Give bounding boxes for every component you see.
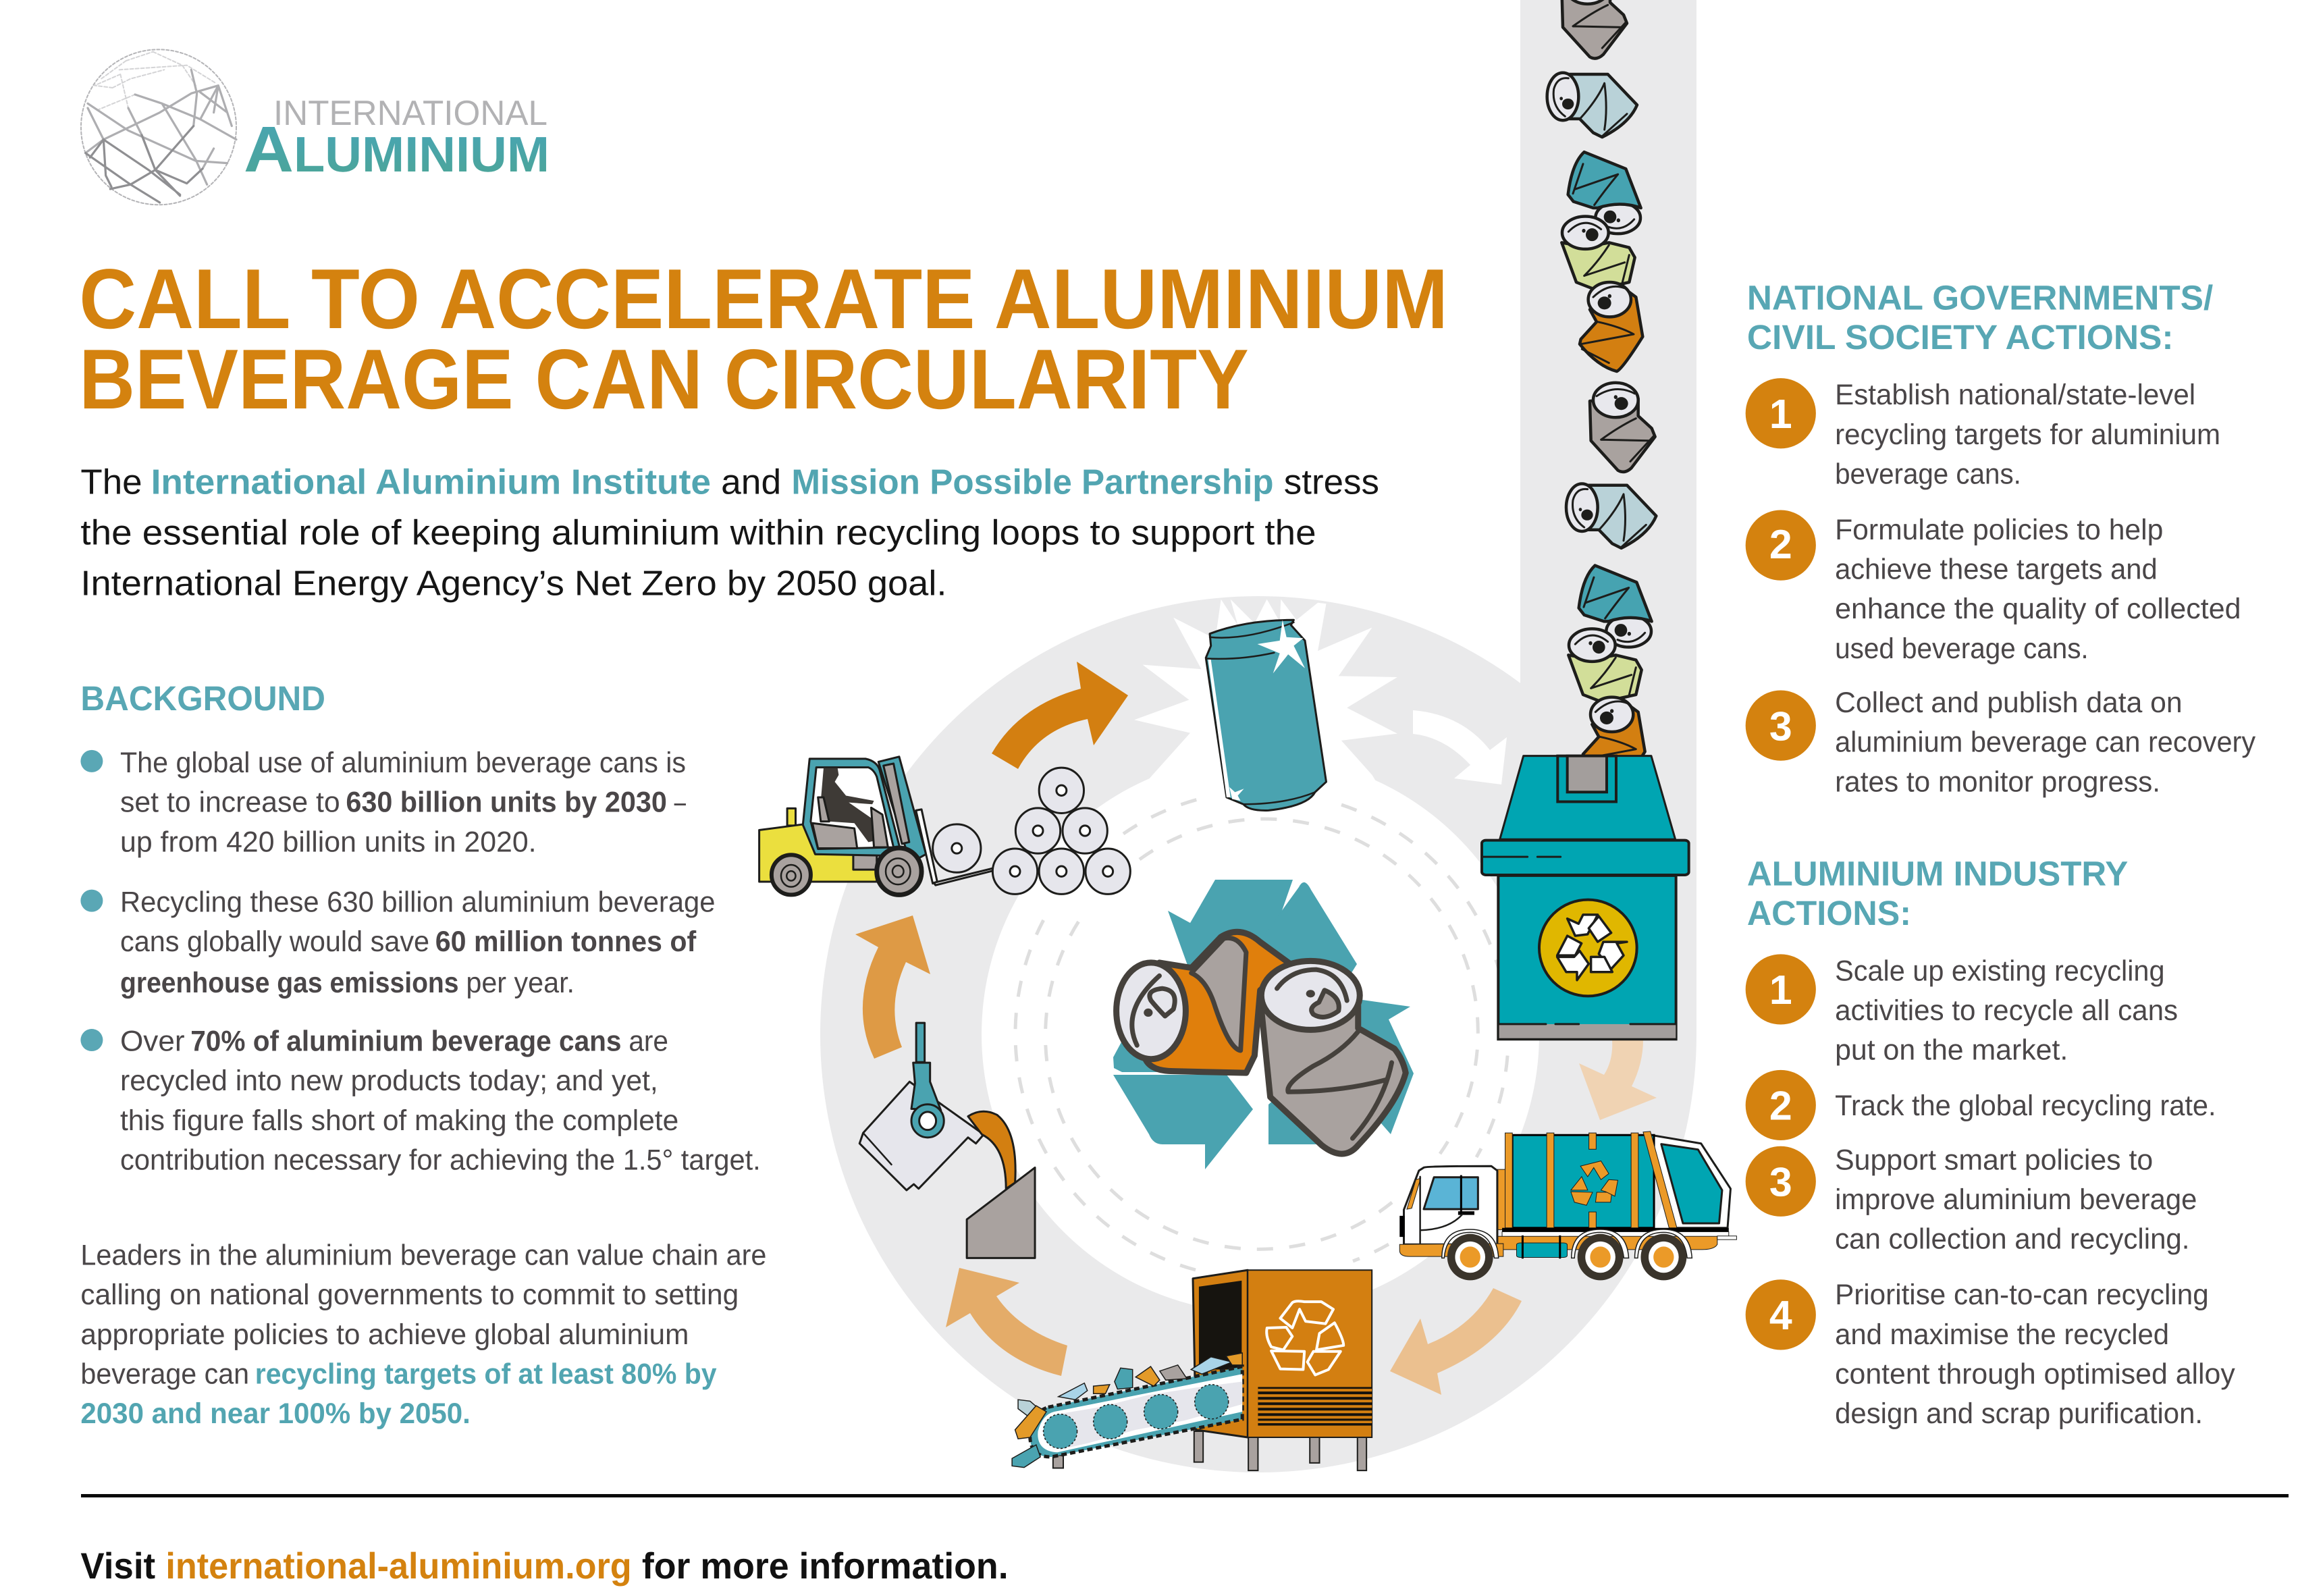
action 3: 3	[1769, 703, 1792, 749]
logo wordmark: A	[244, 113, 294, 186]
icon: central recycling symbol	[1113, 880, 1414, 1169]
background bullet 3: Over	[120, 1026, 185, 1058]
action 3: Collect and publish data on	[1835, 687, 2183, 720]
action 1: Scale up existing recycling	[1835, 955, 2165, 988]
logo wordmark	[244, 94, 550, 186]
call to governments paragraph: appropriate policies to achieve global aluminium	[80, 1319, 689, 1352]
footer text	[80, 1546, 1009, 1587]
yellow recycling badge	[1539, 900, 1637, 996]
action 3: can collection and recycling.	[1835, 1224, 2189, 1256]
icon: forklift carrying aluminium rolls	[759, 757, 1130, 895]
title: CALL TO ACCELERATE ALUMINIUM	[79, 252, 1448, 347]
action 4: 4	[1769, 1293, 1793, 1338]
background bullet 3: this figure falls short of making the complete	[120, 1105, 678, 1138]
icon: new teal can with sparkle	[1206, 620, 1326, 810]
arrow: rolls to new can	[992, 662, 1128, 769]
footer text: international-aluminium.org	[165, 1546, 632, 1587]
introduction paragraph	[80, 463, 1379, 604]
introduction paragraph: Mission Possible Partnership	[791, 463, 1274, 503]
action 4: design and scrap purification.	[1835, 1398, 2203, 1431]
conveyor belt	[1030, 1366, 1242, 1457]
arrow: melting to rolling	[855, 915, 930, 1059]
heading: ALUMINIUM INDUSTRY	[1747, 856, 2129, 894]
recycling symbol on machine	[1266, 1301, 1343, 1375]
action 4: Prioritise can-to-can recycling	[1835, 1279, 2209, 1312]
action 1: put on the market.	[1835, 1035, 2068, 1067]
machine legs	[1053, 1431, 1366, 1470]
background bullet 3: recycled into new products today; and yet,	[120, 1065, 658, 1098]
background bullet 2: 60 million tonnes of	[435, 926, 697, 959]
icon: teal recycling bin	[1482, 756, 1689, 1039]
panel: national governments / civil society actions	[1746, 280, 2255, 799]
background bullet 1: up from 420 billion units in 2020.	[120, 826, 537, 859]
introduction paragraph: International Aluminium Institute	[151, 463, 711, 503]
action 3	[1746, 687, 2255, 799]
action 1: 1	[1769, 392, 1792, 437]
action 2: achieve these targets and	[1835, 554, 2158, 586]
action 3: aluminium beverage can recovery	[1835, 727, 2255, 760]
background bullet 1: 630 billion units by 2030	[346, 787, 667, 820]
background bullet 2: Recycling these 630 billion aluminium beverage	[120, 886, 715, 919]
machine vents	[1258, 1387, 1372, 1426]
action 4: content through optimised alloy	[1835, 1359, 2235, 1391]
truck rear compactor	[1651, 1135, 1730, 1228]
action 3: Support smart policies to	[1835, 1145, 2153, 1177]
call to governments paragraph: beverage can	[80, 1359, 249, 1391]
logo wordmark: LUMINIUM	[294, 126, 550, 182]
arrow: new can to bin	[1413, 710, 1507, 784]
background bullet 3: are	[629, 1026, 668, 1058]
background bullet 2: greenhouse gas emissions	[120, 967, 459, 1000]
background bullet 2	[80, 886, 715, 1000]
action 1	[1746, 378, 2220, 491]
action 2: Track the global recycling rate.	[1835, 1090, 2216, 1123]
footer text: Visit	[80, 1546, 157, 1587]
background bullet 1: The global use of aluminium beverage cans is	[120, 747, 686, 780]
background bullet 1	[80, 747, 686, 859]
background bullet 2: cans globally would save	[120, 926, 429, 959]
introduction paragraph: and	[721, 463, 781, 503]
icon: crushed cans in centre	[1117, 932, 1406, 1154]
icon: ladle pouring molten aluminium into mould	[859, 1023, 1035, 1258]
grey circular loop background with vertical chute	[820, 0, 1696, 1472]
action 2: enhance the quality of collected	[1835, 593, 2241, 626]
machine opening	[1199, 1281, 1241, 1370]
background bullet 3: 70% of aluminium beverage cans	[190, 1026, 622, 1058]
action 3	[1746, 1145, 2197, 1256]
arrow: shredding to melting	[946, 1268, 1067, 1376]
aluminium rolls	[933, 768, 1130, 894]
icon: falling crushed cans stack	[1547, 0, 1656, 787]
action 4	[1746, 1279, 2235, 1431]
logo: International Aluminium	[81, 49, 550, 205]
action 1: recycling targets for aluminium	[1835, 419, 2220, 452]
icon: recycling truck	[1399, 1132, 1736, 1280]
call to governments paragraph: recycling targets of at least 80% by	[255, 1359, 717, 1391]
introduction paragraph: International Energy Agency’s Net Zero by 2050 goal.	[80, 564, 946, 604]
introduction paragraph: stress	[1284, 463, 1379, 503]
waste on conveyor	[1012, 1353, 1242, 1468]
introduction paragraph: The	[80, 463, 142, 503]
action 1: 1	[1769, 967, 1792, 1013]
recycling symbol on truck	[1571, 1161, 1618, 1205]
background heading: BACKGROUND	[80, 681, 325, 719]
background bullet 1: –	[674, 787, 686, 820]
action 1	[1746, 954, 2178, 1067]
icon: sorting machine with conveyor belt	[1012, 1270, 1372, 1470]
orange machine housing	[1193, 1270, 1248, 1437]
grey crushed can	[1260, 961, 1406, 1154]
truck body	[1512, 1135, 1654, 1228]
title	[79, 252, 1448, 427]
action 1: beverage cans.	[1835, 459, 2021, 491]
truck chassis	[1497, 1228, 1736, 1250]
arrow: truck to sorting	[1390, 1288, 1522, 1395]
forklift vehicle	[759, 757, 994, 895]
action 2: 2	[1769, 1083, 1792, 1129]
call to governments paragraph: Leaders in the aluminium beverage can value chain are	[80, 1240, 766, 1272]
action 3: 3	[1769, 1159, 1792, 1205]
action 1: activities to recycle all cans	[1835, 995, 2178, 1028]
truck cab	[1404, 1166, 1497, 1244]
heading	[1747, 280, 2214, 358]
action 4: and maximise the recycled	[1835, 1319, 2169, 1352]
heading: NATIONAL GOVERNMENTS/	[1747, 280, 2214, 319]
action 2	[1746, 510, 2241, 666]
action 3: rates to monitor progress.	[1835, 766, 2160, 799]
logo wordmark: INTERNATIONAL	[273, 94, 547, 133]
action 2: Formulate policies to help	[1835, 514, 2163, 547]
call to governments paragraph: calling on national governments to commit to setting	[80, 1279, 739, 1312]
background bullet 3	[80, 1026, 761, 1177]
call to governments paragraph	[80, 1240, 766, 1431]
action 1: Establish national/state-level	[1835, 379, 2195, 412]
logo globe	[81, 49, 236, 205]
background bullet 2: per year.	[466, 967, 574, 1000]
heading: CIVIL SOCIETY ACTIONS:	[1747, 320, 2174, 358]
truck wheels	[1442, 1229, 1692, 1258]
background bullet 3: contribution necessary for achieving the 1.5° target.	[120, 1145, 761, 1177]
footer text: for more information.	[642, 1546, 1009, 1587]
action 2: used beverage cans.	[1835, 633, 2089, 666]
background bullet 1: set to increase to	[120, 787, 340, 820]
panel: aluminium industry actions	[1746, 856, 2235, 1431]
action 3: improve aluminium beverage	[1835, 1184, 2197, 1217]
introduction paragraph: the essential role of keeping aluminium within recycling loops to support the	[80, 514, 1316, 554]
title: BEVERAGE CAN CIRCULARITY	[79, 332, 1249, 427]
action 2	[1746, 1070, 2216, 1140]
orange crushed can	[1117, 932, 1291, 1073]
dashed inner rings	[1015, 798, 1508, 1270]
heading: ACTIONS:	[1747, 895, 1911, 934]
heading	[1747, 856, 2129, 934]
arrow: bin to truck	[1579, 1040, 1657, 1120]
action 2: 2	[1769, 522, 1792, 567]
call to governments paragraph: 2030 and near 100% by 2050.	[80, 1398, 471, 1431]
